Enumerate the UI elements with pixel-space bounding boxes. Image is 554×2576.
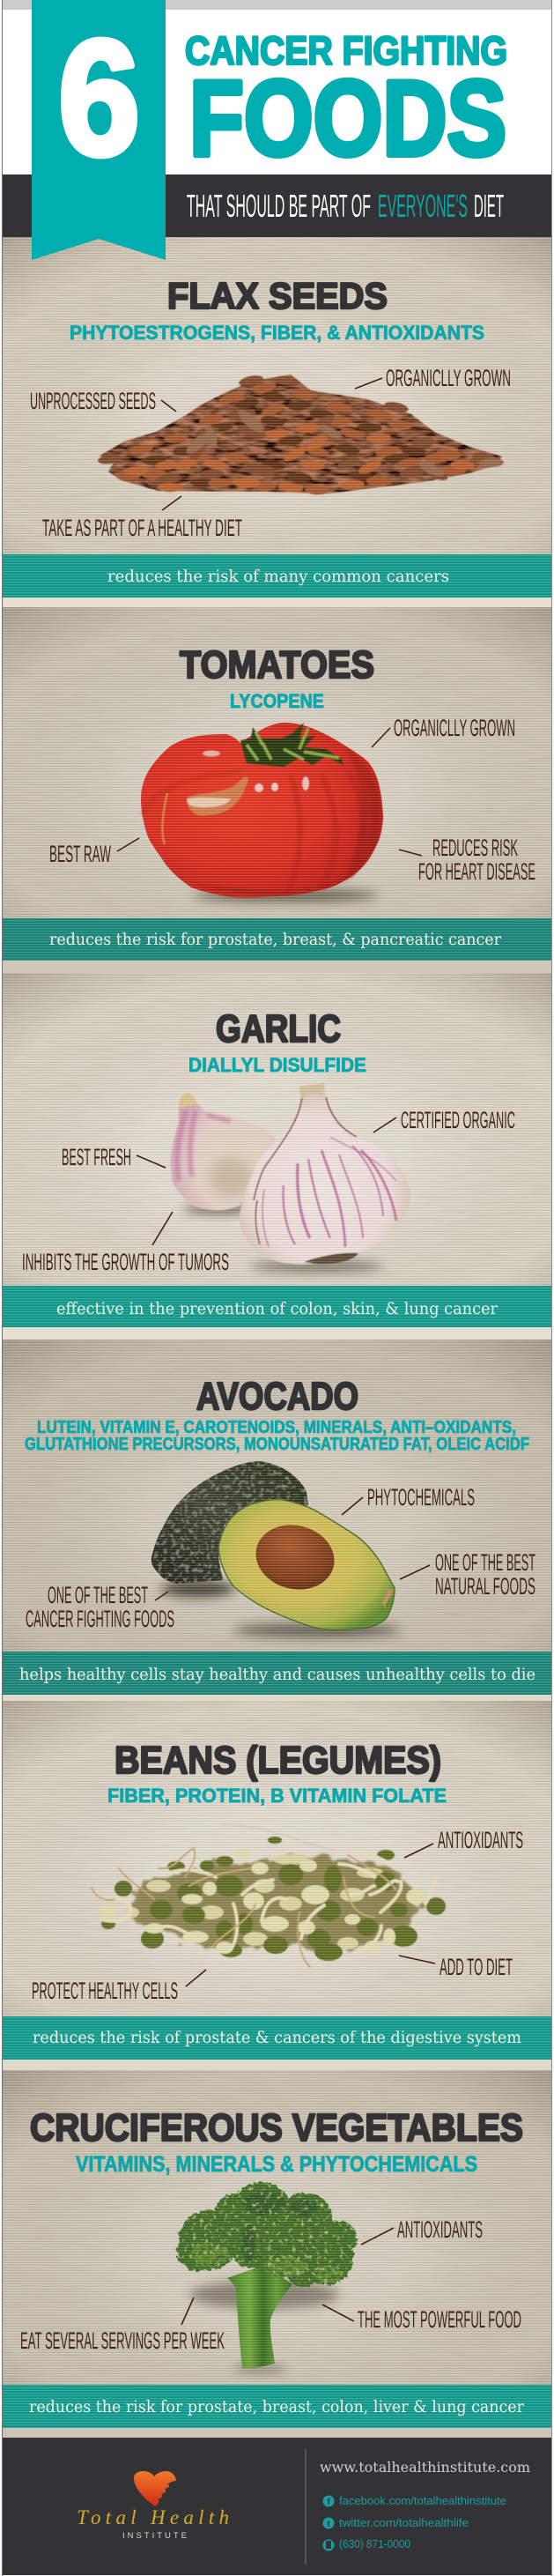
panel: avocado <box>3 1327 551 1695</box>
image: garlic bulbs <box>171 1083 410 1272</box>
heading: garlic: GARLIC <box>216 1007 341 1050</box>
contact: twitter: t <box>327 2520 330 2529</box>
subheading: cruciferous nutrients: VITAMINS, MINERALS & PHYTOCHEMICALS <box>76 2152 477 2177</box>
callout: healthy diet: TAKE AS PART OF A HEALTHY DIET <box>42 515 242 541</box>
banner: flax benefit: reduces the risk of many common cancers <box>107 567 449 586</box>
image: flax seed pile <box>97 374 504 495</box>
contact: twitter: twitter.com/totalhealthlife <box>339 2517 469 2529</box>
callout: best fresh: BEST FRESH <box>62 1144 131 1170</box>
banner: avocado benefit <box>3 1652 551 1695</box>
callout: healthy diet <box>42 496 242 541</box>
callout: natural foods <box>400 1549 536 1600</box>
panel: avocado: CANCER FIGHTING FOODS <box>26 1606 174 1632</box>
callout: protect healthy cells: PROTECT HEALTHY CELLS <box>32 1978 178 2004</box>
callout: phytochemicals <box>342 1484 475 1515</box>
ribbon <box>32 0 166 260</box>
heading: flax seeds: FLAX SEEDS <box>167 275 388 316</box>
banner: cruciferous benefit <box>3 2385 551 2428</box>
banner: garlic benefit <box>3 1286 551 1327</box>
panel: cruciferous vegetables: EAT SEVERAL SERVINGS PER WEEK <box>20 2327 225 2354</box>
callout: certified organic <box>373 1107 515 1133</box>
panel: flax seeds <box>3 237 551 607</box>
callout: best fresh <box>62 1144 166 1170</box>
banner: cruciferous benefit: reduces the risk for prostate, breast, colon, liver & lung cancer <box>29 2397 525 2416</box>
subheading: beans nutrients: FIBER, PROTEIN, B VITAMIN FOLATE <box>107 1785 447 1807</box>
callout: antioxidants <box>361 2216 483 2245</box>
image: bean sprouts <box>92 1824 446 1967</box>
heading: tomatoes: TOMATOES <box>180 643 374 687</box>
subheading: avocado nutrients <box>25 1418 529 1454</box>
broccoli crown <box>177 2182 357 2287</box>
tomato blemish <box>162 751 309 844</box>
banner: tomato benefit: reduces the risk for prostate, breast, & pancreatic cancer <box>49 930 502 949</box>
subheading: lycopene: LYCOPENE <box>230 690 324 712</box>
subheading: flax nutrients: PHYTOESTROGENS, FIBER, & ANTIOXIDANTS <box>70 322 484 344</box>
callout: organicly grown <box>372 715 515 747</box>
callout: add to diet <box>399 1954 513 1980</box>
callout: protect healthy cells <box>32 1970 206 2004</box>
panel: beans <box>3 1695 551 2060</box>
banner: flax benefit <box>3 554 551 598</box>
avocado half <box>218 1499 395 1629</box>
title line: cancer fighting: CANCER FIGHTING <box>185 28 507 73</box>
callout: cancer fighting foods <box>26 1582 174 1632</box>
callout: unprocessed seeds <box>30 388 176 414</box>
logo tagline: INSTITUTE <box>122 2531 187 2541</box>
footer <box>3 2438 551 2575</box>
image: tomato <box>141 723 383 902</box>
callout: best raw: BEST RAW <box>49 841 111 867</box>
callout: heart disease <box>399 835 536 885</box>
banner: garlic benefit: effective in the prevention of colon, skin, & lung cancer <box>56 1299 499 1318</box>
heading: beans: BEANS (LEGUMES) <box>114 1739 441 1782</box>
numeral six: 6 <box>58 7 140 189</box>
contact: facebook: facebook.com/totalhealthinstitute <box>339 2495 506 2507</box>
panel: cruciferous vegetables <box>3 2060 551 2438</box>
callout: cancer fighting foods: ONE OF THE BEST <box>48 1582 148 1608</box>
panel: tomatoes <box>3 607 551 973</box>
logo: total health institute <box>77 2471 229 2541</box>
callout: most powerful food <box>322 2305 521 2333</box>
header: DIET <box>474 188 504 224</box>
subheading: diallyl disulfide: DIALLYL DISULFIDE <box>188 1054 366 1076</box>
panel: garlic: INHIBITS THE GROWTH OF TUMORS <box>22 1249 229 1275</box>
callout: organicly grown <box>355 365 511 391</box>
callout: best raw <box>49 838 139 867</box>
image: broccoli <box>177 2182 357 2372</box>
callout: unprocessed seeds: UNPROCESSED SEEDS <box>30 388 156 414</box>
contact: facebook: f <box>327 2498 330 2507</box>
header <box>3 0 551 260</box>
callout: inhibits tumors <box>22 1212 229 1275</box>
callout: antioxidants <box>404 1827 523 1858</box>
panel: garlic <box>3 961 551 1327</box>
banner: tomato benefit <box>3 918 551 961</box>
banner: beans benefit: reduces the risk of prostate & cancers of the digestive system <box>33 2028 521 2047</box>
website: www.totalhealthinstitute.com <box>320 2459 530 2476</box>
banner: beans benefit <box>3 2016 551 2060</box>
image: avocado <box>151 1461 401 1637</box>
broccoli stem <box>227 2265 292 2368</box>
heading: avocado: AVOCADO <box>196 1375 358 1418</box>
logo name: Total Health <box>77 2506 229 2528</box>
logo heart <box>134 2471 176 2506</box>
avocado whole <box>151 1461 308 1584</box>
callout: several servings <box>20 2298 225 2354</box>
contact: phone: (630) 871-0000 <box>339 2538 410 2550</box>
tomato calyx <box>240 723 343 767</box>
